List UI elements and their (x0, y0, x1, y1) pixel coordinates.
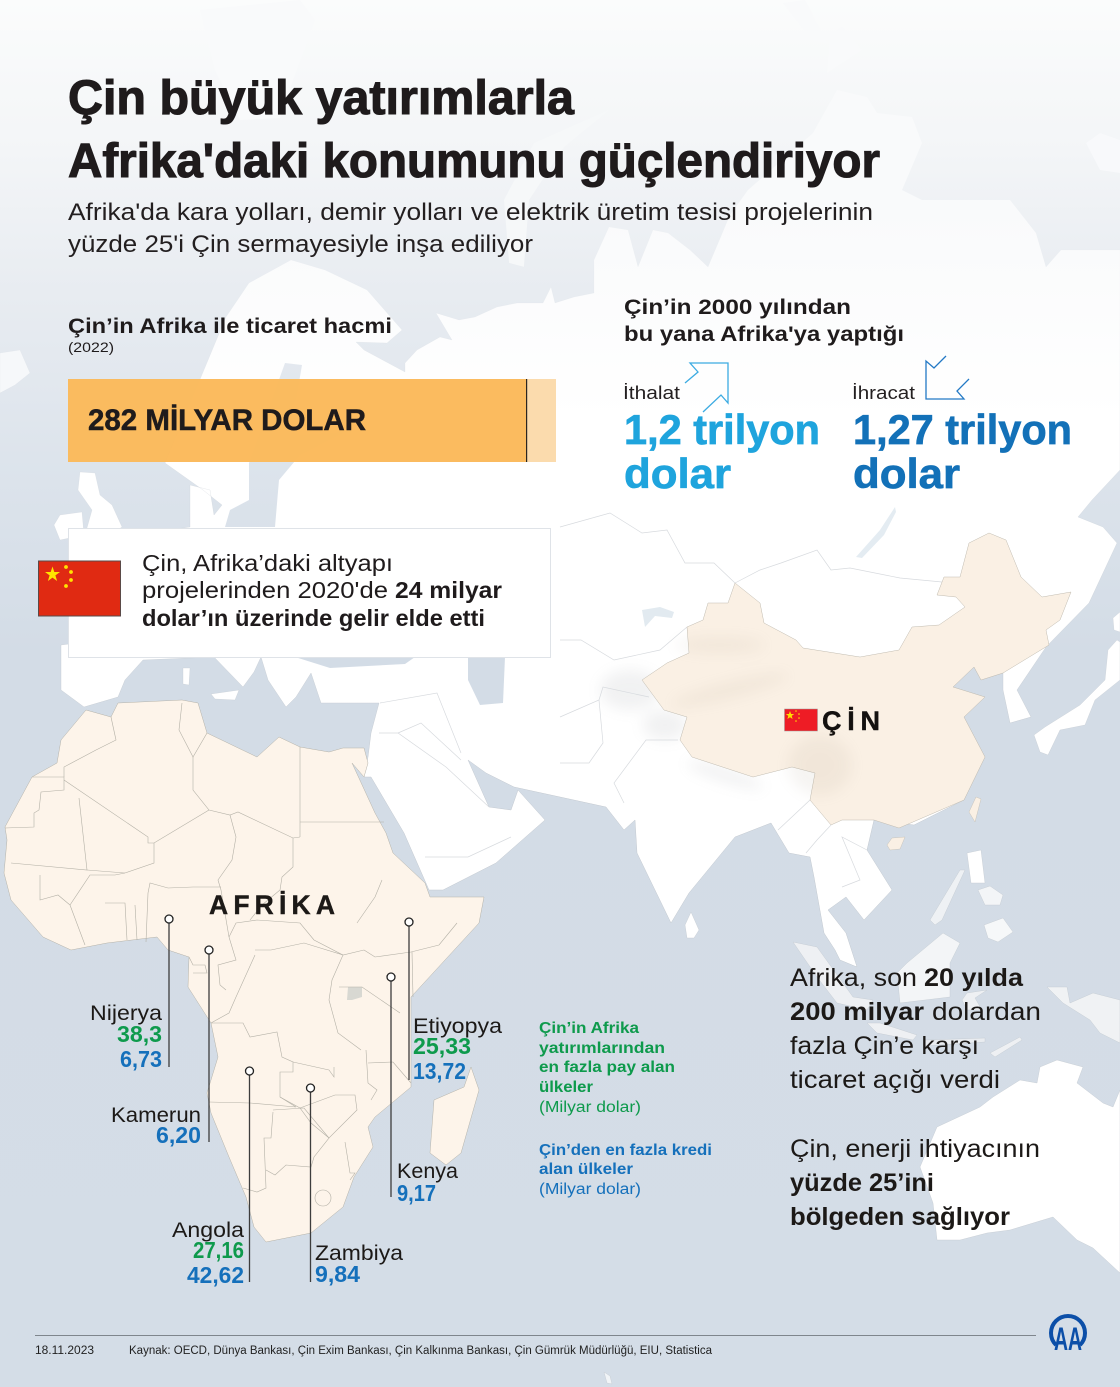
legend: investment share, green: ülkeler (539, 1079, 593, 1096)
legend: credit, blue: alan ülkeler (539, 1161, 633, 1178)
title (68, 72, 880, 188)
text block: trade deficit: dolardan (932, 998, 1041, 1026)
text block: energy need: bölgeden sağlıyor (790, 1203, 1010, 1231)
callout text: dolar’ın üzerinde gelir elde etti (142, 605, 485, 631)
Africa landmass (4, 700, 484, 1242)
imports figure: dolar (624, 450, 731, 497)
legend (539, 1020, 712, 1198)
imports figure (623, 363, 820, 497)
exports figure: dolar (853, 450, 960, 497)
country markers and labels (90, 915, 502, 1288)
China map label (784, 706, 880, 736)
callout text (142, 550, 502, 631)
text block: trade deficit: ticaret açığı verdi (790, 1066, 1000, 1094)
callout text: Çin, Afrika’daki altyapı (142, 550, 393, 576)
icon: AA logo (1051, 1316, 1085, 1357)
marker: Angola (172, 1067, 254, 1288)
Hainan (887, 837, 905, 850)
callout text: projelerinden 2020'de (142, 577, 388, 603)
map region: Africa (4, 700, 484, 1242)
water bodies (225, 363, 896, 705)
legend: investment share, green: Çin’in Afrika (539, 1020, 639, 1037)
legend: credit, blue (539, 1142, 712, 1198)
title: Afrika'daki konumunu güçlendiriyor (68, 135, 880, 188)
icon: AA logo: AA (1054, 1321, 1082, 1357)
legend: investment share, green: (Milyar dolar) (539, 1099, 641, 1116)
mountain shading (600, 670, 765, 794)
subtitle (68, 199, 873, 258)
marker: Kenya: Kenya (397, 1160, 458, 1183)
trade since 2000 heading: Çin’in 2000 yılından (624, 295, 851, 319)
marker: Kamerun: 6,20 (156, 1122, 201, 1148)
subtitle: Afrika'da kara yolları, demir yolları ve elektrik üretim tesisi projelerinin (68, 199, 873, 226)
marker: Nijerya: 6,73 (120, 1046, 162, 1072)
text block: trade deficit: Afrika, son (790, 964, 917, 992)
trade since 2000 heading: bu yana Afrika'ya yaptığı (624, 322, 904, 346)
callout text: 24 milyar (395, 577, 502, 603)
text block: energy need: Çin, enerji ihtiyacının (790, 1135, 1040, 1163)
marker: Zambiya: Zambiya (315, 1242, 403, 1265)
legend: investment share, green: yatırımlarından (539, 1040, 665, 1057)
trade volume heading (68, 314, 392, 355)
exports figure (852, 356, 1072, 497)
title: Çin büyük yatırımlarla (68, 72, 574, 125)
icon: small China flag (784, 709, 818, 731)
relief shading on China (670, 637, 852, 795)
text block: trade deficit: 200 milyar (790, 998, 924, 1026)
text block: trade deficit: 20 yılda (924, 964, 1024, 992)
icon: arrow down-left (926, 356, 969, 399)
Asian country borders (379, 513, 942, 887)
marker: Etiyopya: 13,72 (413, 1058, 466, 1084)
imports figure: 1,2 trilyon (624, 406, 820, 453)
China map label: ÇİN (822, 706, 880, 736)
footer: Kaynak: OECD, Dünya Bankası, Çin Exim Bankası, Çin Kalkınma Bankası, Çin Gümrük Müdürlüğü, EIU, Statistica (129, 1345, 713, 1357)
imports figure: İthalat (623, 382, 680, 403)
text block: energy need (790, 1135, 1040, 1231)
trade volume bar (68, 379, 556, 462)
text block: trade deficit (790, 964, 1041, 1094)
map region: China (642, 533, 1071, 850)
Lake Victoria (347, 987, 362, 1000)
exports figure: 1,27 trilyon (853, 406, 1072, 453)
text block: energy need: yüzde 25’ini (790, 1169, 934, 1197)
trade volume heading: (2022) (68, 340, 114, 355)
marker: Nijerya (90, 915, 173, 1072)
footer: 18.11.2023 (35, 1345, 94, 1357)
icon: China flag (38, 561, 120, 616)
marker: Zambiya (306, 1084, 403, 1287)
panel: infrastructure revenue callout (38, 528, 550, 658)
marker: Kenya: 9,17 (397, 1180, 436, 1206)
marker: Nijerya: 38,3 (117, 1021, 162, 1047)
trade volume heading: Çin’in Afrika ile ticaret hacmi (68, 314, 392, 338)
marker: Kenya (387, 973, 458, 1206)
marker: Etiyopya: Etiyopya (413, 1015, 502, 1038)
marker: Kamerun: Kamerun (111, 1104, 201, 1127)
Taiwan (969, 797, 981, 822)
footer (35, 1336, 1036, 1357)
trade volume bar: 282 MİLYAR DOLAR (88, 404, 366, 437)
subtitle: yüzde 25'i Çin sermayesiyle inşa ediliyor (68, 231, 533, 258)
text block: trade deficit: fazla Çin’e karşı (790, 1032, 979, 1060)
African country borders (5, 703, 457, 1206)
marker: Angola: Angola (172, 1219, 244, 1242)
legend: investment share, green: en fazla pay alan (539, 1059, 675, 1076)
Africa map label: AFRİKA (209, 890, 335, 920)
trade since 2000 heading (624, 295, 904, 346)
legend: investment share, green (539, 1020, 675, 1116)
marker: Kamerun (111, 946, 213, 1148)
marker: Zambiya: 9,84 (315, 1261, 360, 1287)
Madagascar (430, 1067, 479, 1165)
China landmass (642, 533, 1071, 828)
marker: Angola: 27,16 (193, 1237, 244, 1263)
marker: Etiyopya: 25,33 (413, 1033, 471, 1059)
exports figure: İhracat (852, 382, 915, 403)
legend: credit, blue: (Milyar dolar) (539, 1181, 641, 1198)
marker: Nijerya: Nijerya (90, 1002, 162, 1025)
land: Eurasia (61, 90, 1120, 967)
legend: credit, blue: Çin’den en fazla kredi (539, 1142, 712, 1159)
icon: arrow up-right (685, 363, 728, 412)
marker: Angola: 42,62 (187, 1262, 244, 1288)
marker: Etiyopya (405, 918, 502, 1084)
